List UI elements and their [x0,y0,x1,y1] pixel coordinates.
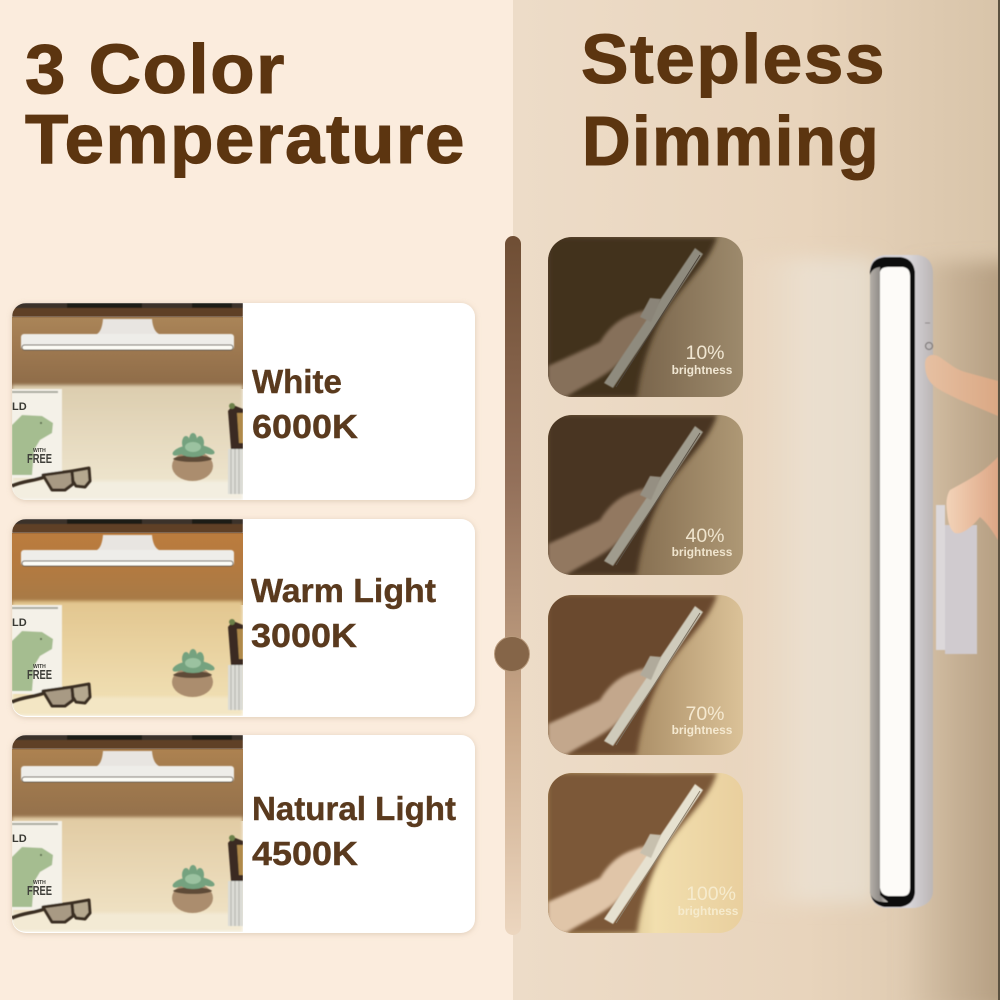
title: 3 Color Temperature: 3 Color [25,30,286,108]
title: 3 Color Temperature [25,30,466,178]
title: 3 Color Temperature: Temperature [25,100,466,178]
thumbnail: 70% brightness [548,595,743,755]
thumbnail: 70% brightness: brightness [672,723,733,737]
label: 70% brightness: 70% [685,703,725,725]
label: White 6000K: 6000K [252,408,358,445]
light beam from lamp [740,258,875,903]
arm [548,310,654,397]
photo: desk lamp in warm light: LD [12,617,27,629]
panel: Warm Light 3000K card [12,519,475,717]
arm [548,846,654,933]
arm [548,668,654,755]
photo: desk lamp in natural light [12,735,243,932]
wall shadow on the right [900,262,1000,1000]
label: Natural Light 4500K [252,790,456,872]
thumbnail: 100% brightness: brightness [678,904,739,918]
title: Stepless Dimming: Stepless [581,20,886,98]
label: 40% brightness: 40% [685,525,725,547]
label: 100% brightness: 100% [686,883,736,905]
photo: desk lamp in white light: WITH [33,448,46,454]
photo: desk lamp in natural light: WITH [33,880,46,886]
label: White 6000K [252,363,358,445]
power icon button [926,342,932,350]
photo: desk lamp in warm light: WITH [33,664,46,670]
dimming slider [494,236,530,935]
photo: desk lamp in white light: FREE [27,451,52,466]
label: Warm Light 3000K: 3000K [251,617,357,654]
finger pressing button [925,355,998,416]
magnetic mount [936,505,977,654]
photo: desk lamp in natural light: FREE [27,883,52,898]
thumbnail: 10% brightness: brightness [672,363,733,377]
label: Natural Light 4500K: Natural Light [252,790,456,827]
background: right panel [513,0,1000,1000]
thumbnail: 40% brightness [548,415,743,575]
photo: desk lamp in white light: LD [12,401,27,413]
label: White 6000K: White [252,363,342,400]
panel: Natural Light 4500K card [12,735,475,933]
title: Stepless Dimming: Dimming [582,102,880,180]
arm [548,488,654,575]
label: Warm Light 3000K [251,572,436,654]
thumbnail: 100% brightness [548,773,743,933]
title: Stepless Dimming [581,20,886,180]
lamp [604,784,703,924]
photo: desk lamp in warm light: FREE [27,667,52,682]
photo: desk lamp in white light [12,303,243,500]
label: 10% brightness: 10% [685,342,725,364]
label: Natural Light 4500K: 4500K [252,835,358,872]
thumbnail: 10% brightness [548,237,743,397]
lamp [604,606,703,746]
photo: desk lamp in warm light [12,519,243,716]
right edge line [998,0,1000,1000]
thumbnail: 40% brightness: brightness [672,545,733,559]
hand holding mount [946,457,998,540]
photo: desk lamp in natural light: LD [12,833,27,845]
lamp [604,426,703,566]
slider knob [494,636,530,672]
label: Warm Light 3000K: Warm Light [251,572,436,609]
lamp [604,248,703,388]
panel: White 6000K card [12,303,475,500]
large light bar [870,255,933,908]
background: left panel [0,0,513,1000]
